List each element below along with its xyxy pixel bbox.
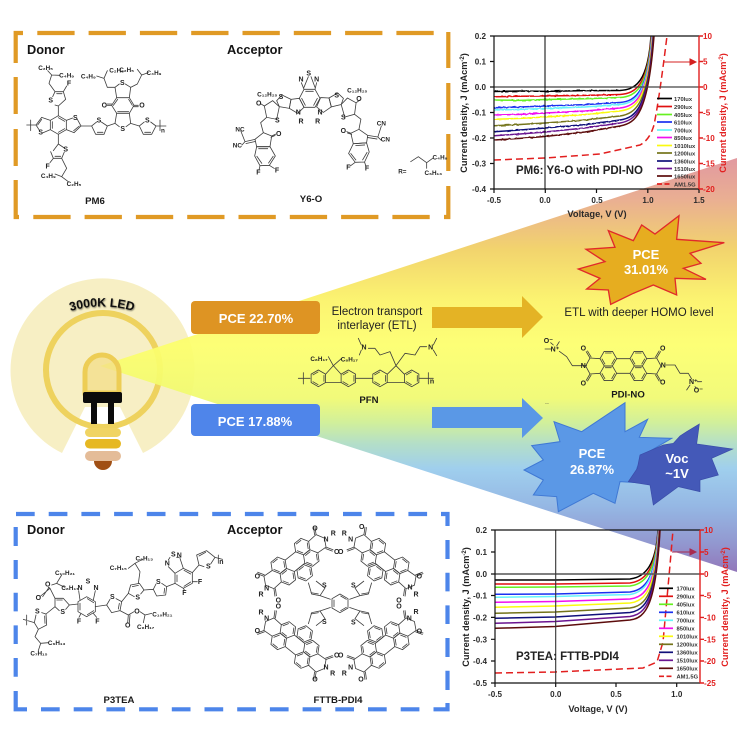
tick labels: -0.4 [472,185,486,194]
molecule: Y6-O: O [256,100,262,107]
molecule: Y6-O: R [298,118,304,125]
chart: P3TEA FTTB-PDI4 J-V curves: -15 [704,636,716,644]
molecule: PM6: S [97,118,102,125]
arrow: blue [432,398,543,438]
molecule: P3TEA [23,551,223,657]
chart: PM6 Y6-O J-V curves: -10 [703,134,715,143]
legend: 1360lux [676,650,699,656]
panel: donor and acceptor PM6 Y6-O [16,32,448,217]
molecule: PM6: F [46,163,51,170]
molecule: P3TEA: F [77,618,82,625]
molecule: PM6: O [139,103,145,110]
tick labels [472,32,486,194]
zero lines [495,573,700,575]
molecule: P3TEA: S [206,564,211,571]
molecule: PFN: N [361,345,367,352]
axes [491,530,700,687]
chart: PM6 Y6-O J-V curves: -15 [703,160,715,168]
chart: P3TEA FTTB-PDI4 J-V curves: 0.5 [610,690,622,699]
label: PDI-NO: PDI-NO [611,390,645,400]
molecule: PM6: S [73,115,78,122]
chart: PM6 Y6-O J-V curves: 0.5 [591,196,603,205]
heading: donor: Donor [27,522,65,537]
arrow to right axis [672,549,696,555]
legend: 1200lux [674,152,696,158]
molecule: Y6-O: S [275,117,280,124]
heading: acceptor: Acceptor [227,42,282,57]
molecule: Y6-O: NC [235,126,245,133]
molecule: PM6: S [48,97,53,104]
chart: PM6 Y6-O J-V curves: 1.0 [642,196,654,205]
chart title: PM6: Y6-O with PDI-NO [516,165,643,177]
text: electron transport interlayer: Electron transport [332,306,423,318]
molecule: P3TEA: C₈H₁₇ [137,624,155,631]
molecule: FTTB-PDI4: R [342,671,347,678]
molecule: PFN: N [428,345,433,352]
molecule: PFN: C₈H₁₇ [310,356,328,363]
tick labels: -0.2 [472,134,486,143]
bar: PCE 17.88%: PCE 17.88% [218,414,293,429]
molecule: P3TEA: F [198,579,203,586]
molecule: FTTB-PDI4: R [413,592,419,599]
chart: P3TEA FTTB-PDI4 J-V curves: Voltage, V (V) [568,704,628,714]
molecule: PDI-NO [544,338,703,394]
molecule: P3TEA: S [60,609,65,616]
molecule: Y6-O: F [275,167,280,174]
legend: 610lux [676,610,695,616]
chart: PM6 Y6-O J-V curves: 1.5 [693,196,705,205]
chart: P3TEA FTTB-PDI4 J-V curves: ) [720,547,730,550]
chart: PM6 Y6-O J-V curves: 5 [703,58,708,66]
label: 3000K LED: 3000K LED [69,298,136,312]
molecule: PM6: C₄H₉ [146,70,162,77]
molecule: PFN [298,338,437,387]
molecule: FTTB-PDI4: O [358,677,364,684]
molecule: FTTB-PDI4: S [351,620,356,627]
tick labels: 0.1 [475,58,486,66]
molecule: FTTB-PDI4: R [258,592,264,599]
tick labels: -0.1 [472,108,486,118]
molecule: PM6: S [38,130,43,137]
panel: donor and acceptor P3TEA FTTB-PDI4 [16,514,447,709]
molecule: FTTB-PDI4: O [276,597,282,604]
molecule: P3TEA: S [135,594,140,601]
chart: P3TEA FTTB-PDI4 J-V curves: 10 [704,526,714,535]
molecule: P3TEA: S [156,579,161,586]
chart: P3TEA FTTB-PDI4 J-V curves: 0 [704,570,709,579]
molecule: FTTB-PDI4: O [334,652,340,659]
molecule: Y6-O: C₁₂H₂₅ [347,87,368,94]
molecule: PM6: S [145,118,150,125]
axis titles: ) [459,53,469,56]
tick labels: -0.1 [473,592,487,600]
text: ETL with deeper HOMO level: ETL with deeper HOMO level [564,307,714,319]
molecule: PDI-NO: O⁻ [694,387,703,394]
molecule: PFN: C₈H₁₇ [341,357,358,364]
axis titles: -2 [462,550,468,556]
chart: PM6 Y6-O J-V curves [459,32,728,219]
molecule: FTTB-PDI4: N [348,537,353,544]
burst: Voc ~1V: Voc [666,451,688,466]
legend: 700lux [674,128,693,134]
molecule: P3TEA: N [165,560,170,567]
molecule: PDI-NO: O [581,346,587,353]
molecule: P3TEA: F [182,590,187,597]
molecule: PM6: F [67,81,72,88]
molecule: FTTB-PDI4: O [396,603,402,610]
chart: PM6 Y6-O J-V curves: -20 [703,185,715,194]
heading: acceptor: Acceptor [227,522,282,537]
molecule: Y6-O: O [276,131,282,138]
chart: P3TEA FTTB-PDI4 J-V curves: -2 [721,550,727,556]
molecule: FTTB-PDI4: O [417,628,423,635]
legend: 700lux [676,618,695,624]
molecule: FTTB-PDI4: S [322,582,327,589]
bar: PCE 22.70%: PCE 22.70% [219,311,294,326]
molecule: PM6: S [63,147,68,154]
tick labels [473,526,487,688]
molecule: FTTB-PDI4: O [276,603,282,610]
chart: PM6 Y6-O J-V curves: ) [718,53,728,56]
molecule: Y6-O: F [346,165,351,172]
legend: 170lux [676,586,695,592]
legend: 1010lux [674,144,696,150]
tick labels: -0.2 [473,614,487,622]
molecule: FTTB-PDI4: O [255,628,261,635]
molecule: FTTB-PDI4 [255,524,424,684]
axis titles: Current density, J (mAcm [459,62,469,173]
molecule: Y6-O: N [296,109,301,116]
molecule: FTTB-PDI4: O [396,597,402,604]
label: PFN: PFN [359,395,379,406]
arrow: orange [432,296,543,338]
molecule: PM6: n [161,127,165,134]
molecule: PM6: S [120,80,125,87]
legend: 1360lux [674,160,696,166]
molecule: P3TEA: N [177,552,182,559]
legend [657,97,696,188]
legend: 290lux [674,105,693,111]
molecule: PDI-NO: N⁺ [689,379,698,386]
molecule: FTTB-PDI4: N [323,537,329,544]
zero lines [494,86,699,88]
chart: PM6 Y6-O J-V curves: Voltage, V (V) [567,209,627,219]
molecule: P3TEA: C₈H₁₇ [61,585,79,592]
chart: P3TEA FTTB-PDI4 J-V curves: Current density, J (mAcm [720,556,730,667]
chart: P3TEA FTTB-PDI4 J-V curves: -20 [704,657,716,666]
molecule: FTTB-PDI4: O [334,549,340,556]
molecule: P3TEA: C₇H₁₅ [110,565,127,572]
molecule: PM6: C₄H₉ [81,73,96,80]
legend: 1650lux [676,666,699,672]
molecule: Y6-O: C₄H₉ [432,155,448,162]
molecule: Y6-O: C₁₂H₂₅ [257,92,278,99]
burst: PCE 26.87% [524,403,672,512]
molecule: PM6: C₂H₅ [109,68,124,75]
tick labels: -0.3 [472,160,486,168]
chart: PM6 Y6-O J-V curves: 0.0 [539,196,551,205]
axes [490,36,699,193]
burst: PCE 31.01%: PCE [633,247,660,262]
chart: P3TEA FTTB-PDI4 J-V curves: -0.5 [488,690,502,699]
legend: 1010lux [676,634,699,640]
tick labels: -0.5 [473,679,487,688]
molecule: P3TEA: n [219,559,223,566]
molecule: FTTB-PDI4: S [351,582,356,589]
curves [494,36,667,160]
burst: PCE 31.01%: 31.01% [624,262,668,277]
chart: PM6 Y6-O J-V curves: -5 [703,108,711,118]
tick labels: 0.0 [475,83,486,92]
molecule: Y6-O: N [298,77,304,84]
legend: AM1.5G [676,674,699,680]
molecule: P3TEA: F [95,618,100,625]
legend: 850lux [676,626,695,632]
molecule: FTTB-PDI4: S [322,619,327,626]
burst: PCE 26.87%: PCE [579,446,606,461]
legend: 1510lux [674,167,696,173]
molecule: PDI-NO: O⁻ [544,338,553,345]
molecule: Y6-O: S [279,94,284,101]
burst: PCE 31.01% [578,216,724,304]
molecule: PM6: O [102,103,108,110]
molecule: Y6-O: O [341,128,347,135]
molecule: P3TEA: C₆H₁₃ [48,640,66,647]
text: electron transport interlayer: interlayer (ETL) [337,320,417,332]
molecule: P3TEA: O [134,609,140,616]
molecule: P3TEA: C₇H₁₅ [30,650,48,657]
label: Y6-O: Y6-O [300,194,323,205]
light cone gradient from LED [100,158,737,572]
molecule: FTTB-PDI4: N [264,616,269,623]
chart: PM6 Y6-O J-V curves: -0.5 [487,196,501,205]
chart title: P3TEA: FTTB-PDI4 [516,651,619,663]
molecule: FTTB-PDI4: O [338,549,344,556]
molecule: P3TEA: S [110,594,115,601]
molecule: P3TEA: O [45,582,51,589]
molecule: FTTB-PDI4: O [312,526,318,533]
icon: LED bulb [83,355,122,470]
legend: 170lux [674,97,693,103]
molecule: FTTB-PDI4: R [342,531,347,538]
legend: 1650lux [674,174,696,180]
tick labels: 0.1 [476,548,487,557]
text: electron transport interlayer [332,306,423,332]
tick labels: 0.2 [476,526,487,535]
molecule: PDI-NO: O [660,346,666,353]
legend: 610lux [674,120,693,126]
tick labels: 0.0 [476,570,487,579]
chart: P3TEA FTTB-PDI4 J-V curves: -5 [704,592,712,600]
burst: Voc ~1V [628,424,733,505]
tick labels: -0.3 [473,636,487,644]
molecule: Y6-O [233,71,448,177]
legend [659,586,699,680]
axis titles: ) [461,547,471,550]
molecule: PDI-NO: O [581,381,587,388]
molecule: FTTB-PDI4: N [264,586,269,593]
molecule: Y6-O: CN [377,121,386,128]
label: FTTB-PDI4: FTTB-PDI4 [313,695,363,706]
molecule: P3TEA: S [171,552,176,559]
molecule: PM6: C₄H₉ [41,173,56,180]
bar: PCE 22.70% [191,301,320,334]
molecule: P3TEA: C₁₀H₂₁ [152,612,173,619]
legend: 405lux [676,602,695,608]
molecule: PFN: n [430,379,434,386]
tick labels: -0.4 [473,657,487,666]
molecule: FTTB-PDI4: R [331,531,336,538]
icon: 3000K LED bulb glow [11,278,195,453]
molecule: Y6-O: R= [398,168,407,175]
axis titles: Current density, J (mAcm [461,556,471,667]
molecule: Y6-O: S [334,93,339,100]
molecule: P3TEA: O [125,622,131,629]
molecule: P3TEA: N [77,585,83,592]
chart: PM6 Y6-O J-V curves: 0 [703,83,708,92]
molecule: P3TEA: O [36,595,42,602]
molecule: FTTB-PDI4: N [348,665,353,672]
chart: PM6 Y6-O J-V curves: Current density, J (mAcm [718,62,728,173]
legend: 290lux [676,594,695,600]
molecule: FTTB-PDI4: N [407,585,413,592]
chart: P3TEA FTTB-PDI4 J-V curves: -25 [704,679,716,688]
molecule: Y6-O: O [356,96,362,103]
molecule: PDI-NO: N⁺ [551,347,560,354]
legend: 1200lux [676,642,699,648]
molecule: FTTB-PDI4: N [407,616,412,623]
burst: PCE 26.87%: 26.87% [570,462,614,477]
legend: 405lux [674,113,693,119]
axis titles: -2 [460,56,466,62]
chart: P3TEA FTTB-PDI4 J-V curves: 0.0 [550,690,562,699]
molecule: Y6-O: F [256,170,261,177]
molecule: PDI-NO: N [581,363,586,370]
legend: AM1.5G [674,182,696,188]
molecule: Y6-O: S [306,71,311,78]
molecule: P3TEA: S [35,608,40,615]
molecule: PM6: C₂H₅ [119,67,134,74]
molecule: FTTB-PDI4: O [312,677,318,684]
molecule: Y6-O: N [317,109,323,116]
curves [495,530,673,673]
tick labels: 0.2 [475,32,486,41]
chart: P3TEA FTTB-PDI4 J-V curves: 1.0 [671,690,683,699]
chart: PM6 Y6-O J-V curves: -2 [719,56,725,62]
molecule: FTTB-PDI4: O [417,573,423,580]
molecule: PM6: C₂H₅ [38,65,53,72]
chart: PM6 Y6-O J-V curves: 10 [703,32,713,41]
molecule: P3TEA: S [86,578,91,585]
legend: 1510lux [676,658,699,664]
molecule: P3TEA: C₆H₁₃ [136,556,153,563]
molecule: FTTB-PDI4: O [359,524,365,531]
molecule: P3TEA: C₁₀H₂₁ [55,570,75,577]
molecule: PDI-NO: N [661,362,666,369]
molecule: FTTB-PDI4: N [323,665,329,672]
molecule: FTTB-PDI4: R [330,671,335,678]
molecule: PM6 [27,65,166,188]
chart: P3TEA FTTB-PDI4 J-V curves: -10 [704,614,716,622]
label: P3TEA: P3TEA [104,695,135,706]
molecule: Y6-O: N [314,77,319,84]
arrow to right axis [664,59,696,65]
heading: donor: Donor [27,42,65,57]
burst: Voc ~1V: ~1V [665,466,689,481]
molecule: FTTB-PDI4: R [258,610,264,617]
molecule: PM6: C₂H₅ [67,181,82,188]
molecule: Y6-O: F [365,166,370,173]
molecule: PDI-NO: O [660,380,666,387]
molecule: Y6-O: NC [233,143,242,150]
molecule: FTTB-PDI4: O [255,573,261,580]
molecule: PM6: S [120,126,125,133]
legend: 850lux [674,136,693,142]
molecule: PM6: C₄H₉ [59,72,74,79]
molecule: P3TEA: N [93,585,99,592]
small marks: .. [545,399,549,406]
molecule: Y6-O: C₆H₁₃ [425,170,442,177]
molecule: Y6-O: CN [381,137,390,144]
molecule: FTTB-PDI4: R [413,609,419,616]
bar: PCE 17.88% [191,404,320,436]
label: PM6: PM6 [85,196,105,207]
molecule: Y6-O: R [315,118,320,125]
chart: P3TEA FTTB-PDI4 J-V curves: 5 [704,548,709,557]
molecule: FTTB-PDI4: O [338,652,344,659]
chart: P3TEA FTTB-PDI4 J-V curves [461,526,730,714]
molecule: Y6-O: S [341,115,346,122]
